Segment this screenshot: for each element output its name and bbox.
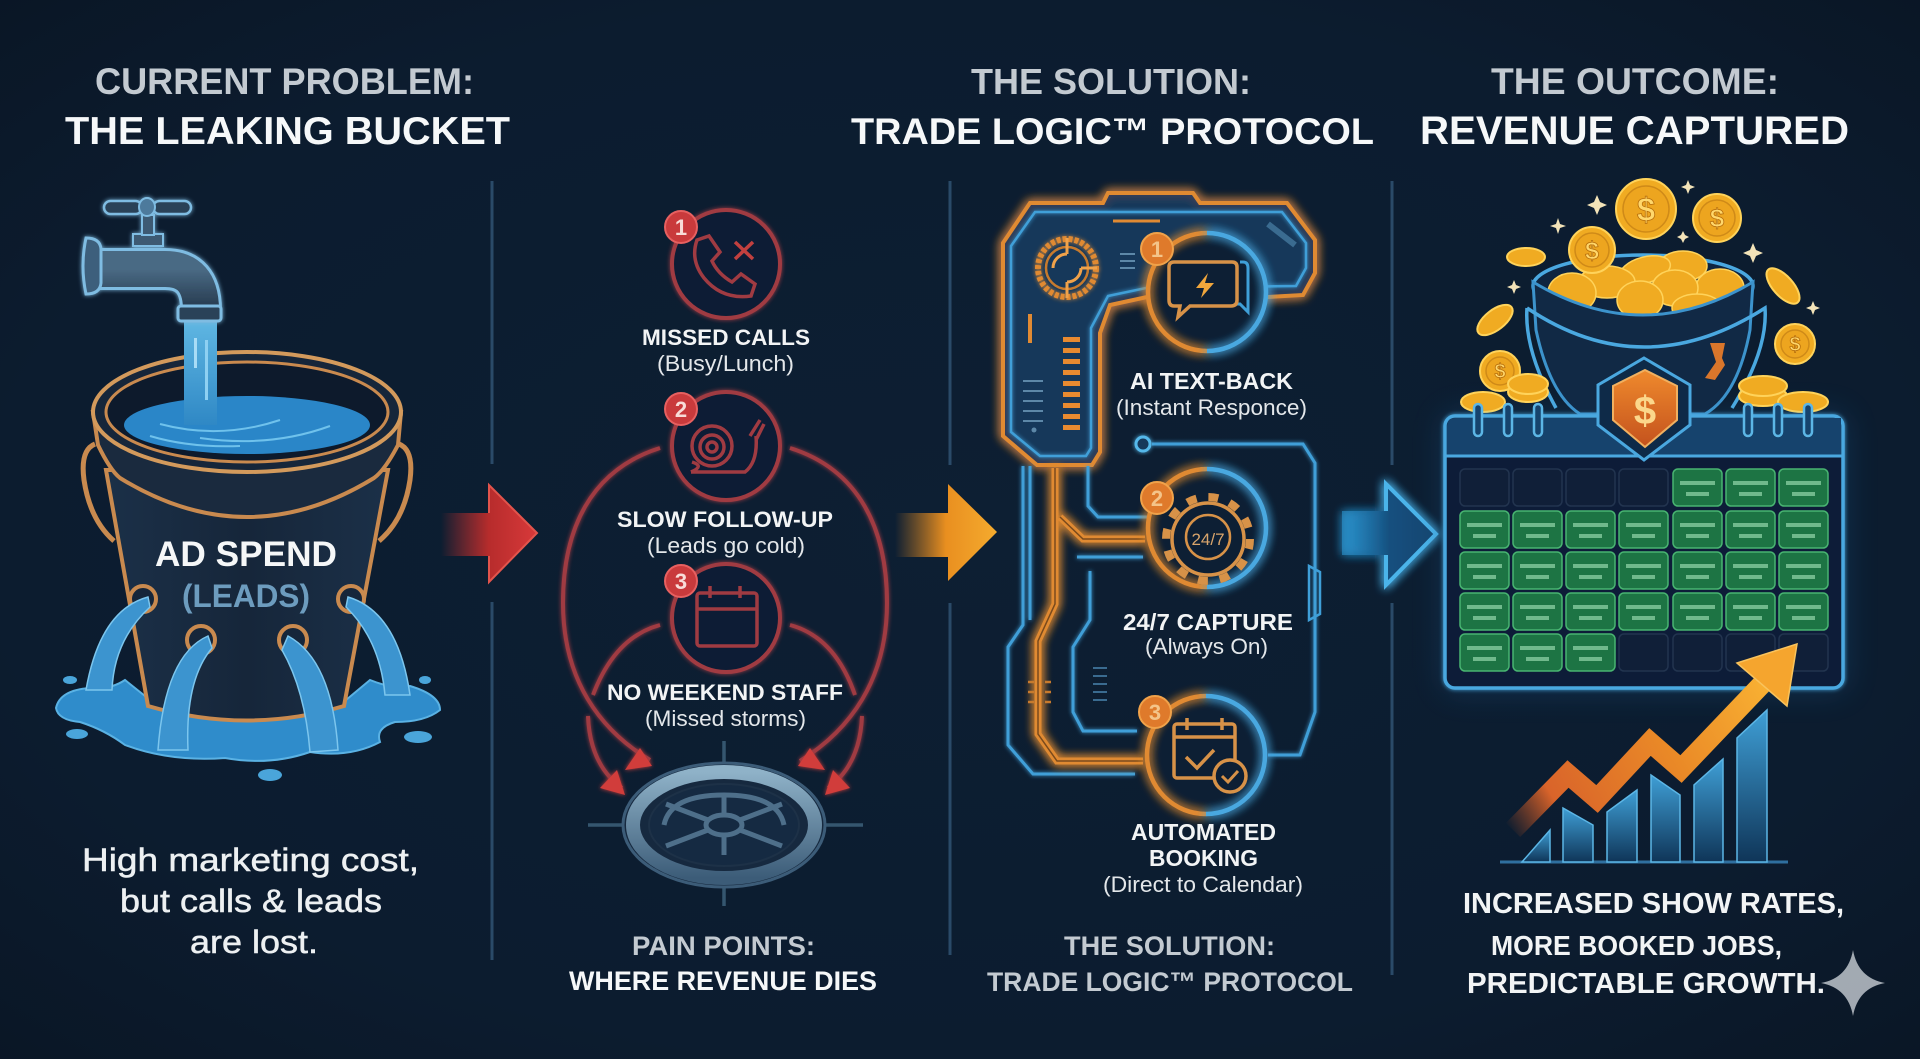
coins: $	[1710, 203, 1725, 233]
pain point 3: no weekend staff: 3	[675, 569, 687, 594]
heading: the outcome	[1420, 61, 1849, 153]
heading: pain points: PAIN POINTS:	[632, 931, 815, 961]
pain point 2: slow follow-up: SLOW FOLLOW-UP	[617, 507, 833, 532]
arrow: red	[441, 485, 537, 582]
pain point 2: slow follow-up: 2	[675, 397, 687, 422]
pain point 1: missed calls: MISSED CALLS	[642, 325, 810, 350]
icon: corner sparkle	[1821, 950, 1885, 1016]
caption: outcome	[1463, 888, 1844, 1000]
step 1: ai text-back: (Instant Responce)	[1116, 395, 1307, 420]
panel: the solution	[851, 61, 1374, 997]
sparkles	[1507, 180, 1820, 315]
pain point 2: slow follow-up	[617, 392, 833, 558]
bucket label: AD SPEND	[155, 535, 337, 574]
panel: the outcome	[1420, 61, 1850, 1000]
step 2: 24/7 capture: (Always On)	[1145, 634, 1268, 659]
heading: the solution	[851, 61, 1374, 152]
heading: the outcome: REVENUE CAPTURED	[1420, 109, 1849, 153]
pain point 3: no weekend staff: NO WEEKEND STAFF	[607, 680, 843, 705]
arrow: blue	[1342, 484, 1436, 585]
booking grid	[1460, 469, 1828, 671]
step 2: 24/7 capture: 2	[1151, 486, 1163, 511]
pain point 1: missed calls: (Busy/Lunch)	[657, 351, 794, 376]
icon: shield badge: $	[1634, 389, 1656, 433]
device: control unit	[1003, 193, 1315, 465]
step 3: automated booking: (Direct to Calendar)	[1103, 872, 1303, 897]
step 2: 24/7 capture: 24/7 CAPTURE	[1123, 609, 1293, 635]
caption: problem	[82, 842, 419, 960]
panel: current problem	[56, 61, 510, 960]
step 3: automated booking: AUTOMATED	[1131, 819, 1276, 845]
caption: problem: are lost.	[190, 924, 318, 960]
subheading: the solution: TRADE LOGIC™ PROTOCOL	[987, 967, 1353, 997]
heading: the solution: TRADE LOGIC™ PROTOCOL	[851, 111, 1374, 152]
heading: current problem: THE LEAKING BUCKET	[65, 110, 510, 153]
step 2: 24/7 capture: 24/7	[1191, 530, 1225, 549]
pain point 3: no weekend staff: (Missed storms)	[645, 706, 806, 731]
icon: shield badge	[1598, 358, 1690, 460]
step 1: ai text-back: AI TEXT-BACK	[1130, 368, 1293, 394]
subheading: the solution	[987, 931, 1353, 997]
step 3: automated booking: 3	[1149, 700, 1161, 725]
heading: current problem: CURRENT PROBLEM:	[95, 61, 474, 102]
heading: the solution: THE SOLUTION:	[971, 61, 1251, 102]
step 2: 24/7 capture	[1123, 469, 1293, 659]
pain point 1: missed calls	[642, 210, 810, 376]
step 1: ai text-back	[1116, 233, 1307, 420]
caption: outcome: INCREASED SHOW RATES,	[1463, 888, 1844, 920]
caption: problem: but calls & leads	[120, 883, 382, 919]
heading: the outcome: THE OUTCOME:	[1491, 61, 1779, 102]
heading: pain points: WHERE REVENUE DIES	[569, 966, 877, 996]
faucet	[83, 198, 221, 321]
step 1: ai text-back: 1	[1151, 237, 1163, 262]
calendar	[1445, 404, 1843, 688]
circuit lines	[1008, 437, 1320, 774]
coins: $	[1585, 237, 1599, 265]
icon: drain	[588, 741, 863, 906]
arrow: orange	[895, 484, 997, 581]
flow arcs into drain	[563, 448, 887, 795]
panel: pain points	[563, 210, 887, 996]
bucket label	[155, 535, 337, 614]
icon: leaking bucket with faucet	[56, 198, 440, 781]
pain point 2: slow follow-up: (Leads go cold)	[647, 533, 805, 558]
caption: problem: High marketing cost,	[82, 842, 419, 878]
coins: $	[1637, 191, 1655, 228]
water stream	[184, 322, 217, 425]
pain point 3: no weekend staff	[607, 564, 843, 731]
icon: pot of coins	[1527, 251, 1765, 414]
step 3: automated booking	[1103, 696, 1303, 897]
pain point 1: missed calls: 1	[675, 215, 687, 240]
heading: current problem	[65, 61, 510, 153]
glow behind illustration	[1440, 410, 1850, 695]
caption: outcome: MORE BOOKED JOBS,	[1491, 930, 1782, 961]
heading: pain points	[569, 931, 877, 996]
bucket label: (LEADS)	[182, 578, 310, 614]
subheading: the solution: THE SOLUTION:	[1064, 931, 1275, 961]
coins	[1461, 179, 1828, 412]
step 3: automated booking: BOOKING	[1149, 845, 1258, 871]
coins: $	[1494, 361, 1506, 383]
coins: $	[1789, 334, 1801, 356]
growth chart	[1500, 644, 1797, 862]
caption: outcome: PREDICTABLE GROWTH.	[1467, 968, 1825, 1000]
